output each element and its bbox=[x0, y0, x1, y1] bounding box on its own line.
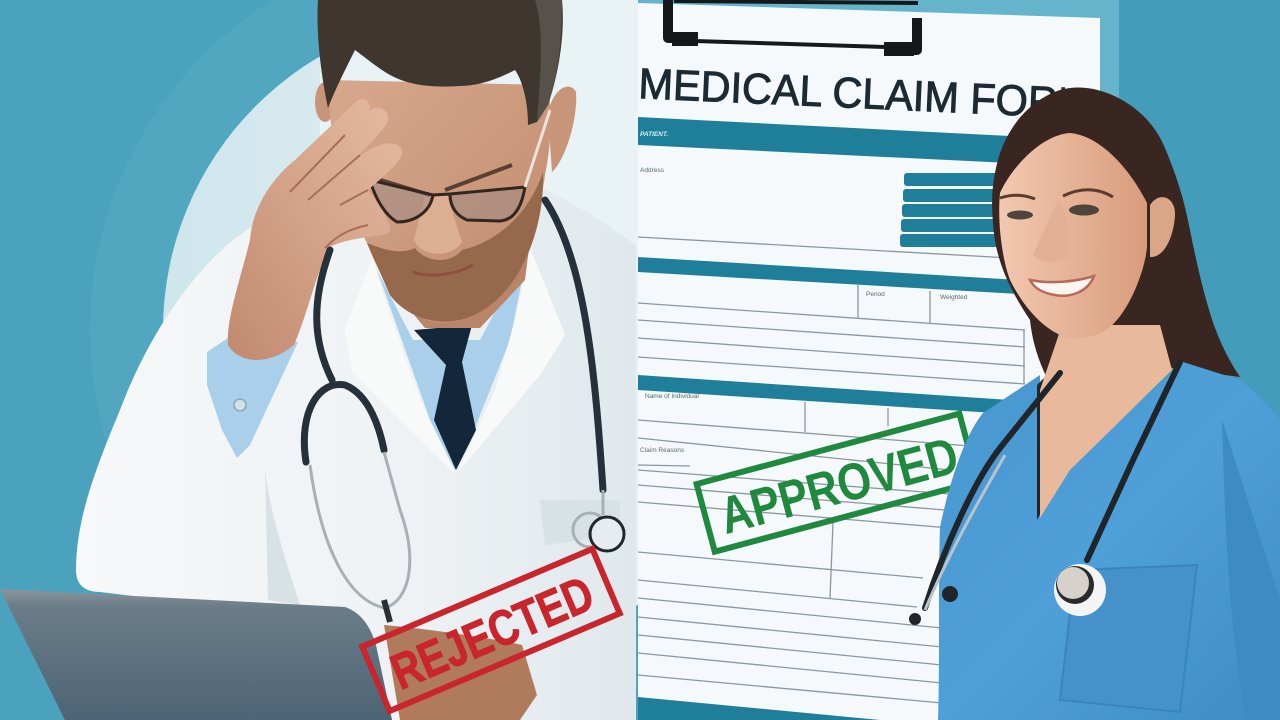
clipboard backing bbox=[638, 0, 1119, 720]
laptop bbox=[0, 589, 392, 720]
stamp: rejected: REJECTED bbox=[383, 565, 602, 700]
coat shading bbox=[265, 470, 620, 605]
form labels: Name of Individual bbox=[645, 393, 699, 400]
stethoscope bbox=[304, 200, 603, 490]
grey hair side bbox=[535, 0, 562, 122]
smile bbox=[1030, 276, 1094, 296]
stethoscope tube bbox=[310, 452, 603, 608]
stethoscope tube highlight bbox=[925, 455, 1005, 610]
shirt cuff bbox=[207, 330, 298, 458]
form labels: Weighted bbox=[940, 294, 968, 301]
icon: clipboard clip bbox=[668, 0, 918, 56]
scrub pocket bbox=[1060, 565, 1197, 712]
figure: smiling nurse bbox=[909, 88, 1280, 720]
nose bbox=[1033, 200, 1070, 262]
right teal background bbox=[1118, 0, 1280, 720]
stamp: approved: APPROVED bbox=[714, 427, 964, 546]
earpiece bbox=[909, 613, 921, 625]
stethoscope chest piece bbox=[573, 513, 624, 551]
form labels: Period bbox=[866, 291, 885, 298]
form labels: Claim Reasons bbox=[640, 447, 685, 454]
form labels: PATIENT. bbox=[640, 131, 668, 138]
form title: MEDICAL CLAIM FORM bbox=[638, 60, 1093, 129]
form rule lines bbox=[638, 237, 1025, 703]
hand at bottom bbox=[384, 625, 537, 720]
eyes and brows bbox=[1000, 190, 1113, 220]
light panel behind doctor bbox=[320, 0, 638, 420]
shirt bbox=[377, 250, 528, 470]
stethoscope lower fitting bbox=[384, 600, 390, 622]
finger gaps bbox=[290, 135, 368, 248]
tie bbox=[414, 325, 476, 470]
hand on forehead bbox=[228, 99, 402, 360]
nose bbox=[414, 195, 462, 254]
ear bbox=[1150, 197, 1175, 257]
sleeve seam bbox=[1222, 420, 1280, 720]
neck and chest bbox=[1040, 325, 1172, 518]
right ear bbox=[548, 87, 576, 172]
form labels: Address bbox=[640, 167, 665, 174]
nurse stethoscope bbox=[925, 362, 1180, 608]
brows bbox=[367, 165, 512, 195]
glasses temple bbox=[525, 110, 550, 187]
left ear bbox=[315, 82, 335, 122]
face bbox=[999, 133, 1147, 338]
figure: doctor with headache bbox=[76, 0, 636, 720]
cuff button bbox=[234, 399, 246, 411]
lapels bbox=[345, 258, 456, 475]
scrub top bbox=[938, 362, 1280, 720]
neck bbox=[385, 240, 530, 328]
chest piece bbox=[1054, 564, 1106, 616]
collar shadow bbox=[1037, 378, 1045, 520]
form labels bbox=[640, 131, 968, 454]
glasses bbox=[370, 180, 525, 222]
beard bbox=[367, 172, 543, 322]
form section bars bbox=[638, 117, 1020, 720]
panel: claim form bbox=[638, 3, 1100, 720]
face bbox=[329, 80, 551, 323]
light halo circle bbox=[163, 13, 797, 647]
hair back bbox=[992, 88, 1240, 378]
coat bbox=[76, 185, 636, 720]
mouth bbox=[413, 265, 473, 275]
hair bbox=[317, 0, 563, 125]
lighter ring bbox=[90, 0, 870, 720]
